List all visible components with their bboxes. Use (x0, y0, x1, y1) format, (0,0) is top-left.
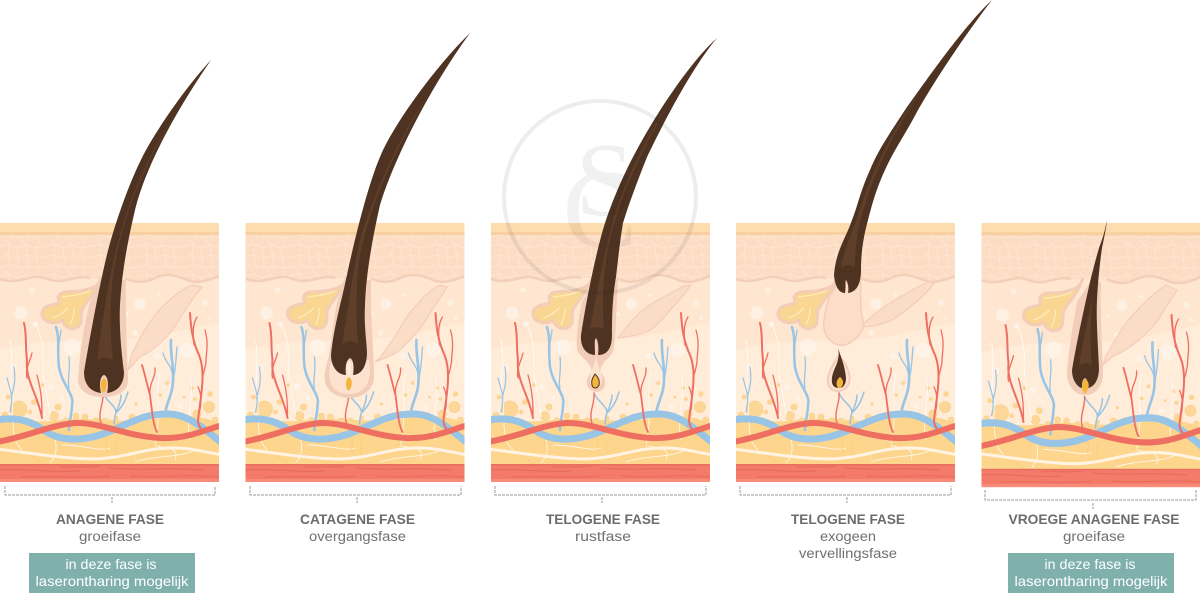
skin cross-section (242, 223, 468, 482)
skin cross-section (733, 223, 958, 482)
follicle (577, 280, 618, 392)
callout: laser possible, vroege anagene: laserontharing mogelijk (1014, 573, 1169, 589)
hair highlight (590, 105, 668, 330)
label: telogene fase exogeen: TELOGENE FASE (791, 511, 905, 527)
shed hair (834, 0, 992, 293)
arrector muscle (375, 285, 447, 362)
label: anagene fase (56, 511, 164, 544)
label: telogene fase rustfase: TELOGENE FASE (546, 511, 660, 527)
bracket: telogene exogeen (740, 486, 951, 503)
bracket: anagene (5, 486, 215, 503)
hair highlight (342, 95, 428, 345)
new germ (592, 374, 599, 388)
callout: laser possible, vroege anagene (1008, 553, 1174, 593)
label: vroege anagene fase: groeifase (1063, 529, 1125, 544)
panel: vroege anagene fase (978, 220, 1200, 487)
empty follicle (824, 280, 864, 345)
hair highlight (1079, 295, 1093, 366)
arrector muscle (1103, 285, 1177, 365)
label: anagene fase: ANAGENE FASE (56, 511, 164, 527)
hair highlight (841, 92, 920, 268)
hair highlight (97, 120, 172, 362)
follicle (325, 280, 374, 398)
watermark logo: C (563, 148, 637, 272)
hair shaft and bulb (331, 33, 470, 375)
arrector muscle (128, 285, 202, 370)
callout: laser possible, anagene: laserontharing mogelijk (36, 573, 190, 589)
bracket: telogene rustfase (495, 486, 706, 503)
label: vroege anagene fase (1008, 511, 1180, 544)
papilla (346, 377, 352, 390)
arrector muscle (618, 285, 691, 338)
skin cross-section (488, 223, 713, 482)
follicle (78, 280, 128, 397)
papilla (837, 377, 843, 388)
callout: laser possible, vroege anagene: in deze fase is (1044, 556, 1136, 572)
label: catagene fase: CATAGENE FASE (300, 511, 415, 527)
hair shaft and club root (581, 38, 717, 355)
watermark logo: S (576, 121, 634, 238)
bracket: vroege anagene (985, 490, 1196, 509)
bracket: catagene (250, 486, 461, 503)
new hair germ (832, 348, 846, 388)
panel: telogene fase exogeen (733, 0, 992, 482)
label: telogene fase exogeen (791, 511, 905, 561)
papilla stalk (348, 360, 350, 377)
hair shaft and bulb (84, 60, 211, 393)
label: telogene fase exogeen: vervellingsfase (799, 546, 897, 561)
panel: telogene fase rustfase (488, 38, 717, 482)
watermark logo (504, 101, 696, 293)
label: telogene fase rustfase: rustfase (575, 529, 631, 544)
callout: laser possible, anagene (29, 553, 195, 593)
skin cross-section (0, 223, 222, 482)
new follicle sac (828, 356, 850, 391)
follicle (1067, 282, 1103, 395)
hair shaft and bulb (1072, 220, 1107, 388)
panel: catagene fase (242, 33, 470, 482)
callout: laser possible, anagene: in deze fase is (66, 556, 156, 572)
label: catagene fase: overgangsfase (309, 529, 406, 544)
label: anagene fase: groeifase (79, 529, 141, 544)
panel: anagene fase (0, 60, 222, 482)
label: telogene fase rustfase (546, 511, 660, 544)
label: telogene fase exogeen: exogeen (820, 529, 876, 544)
arrector muscle (860, 282, 935, 327)
label: vroege anagene fase: VROEGE ANAGENE FASE (1008, 511, 1180, 527)
follicle neck and sac (590, 356, 602, 386)
papilla (1082, 379, 1089, 393)
papilla (101, 378, 107, 392)
skin cross-section (978, 223, 1200, 487)
label: catagene fase (300, 511, 415, 544)
follicle lower pale space (329, 360, 370, 394)
